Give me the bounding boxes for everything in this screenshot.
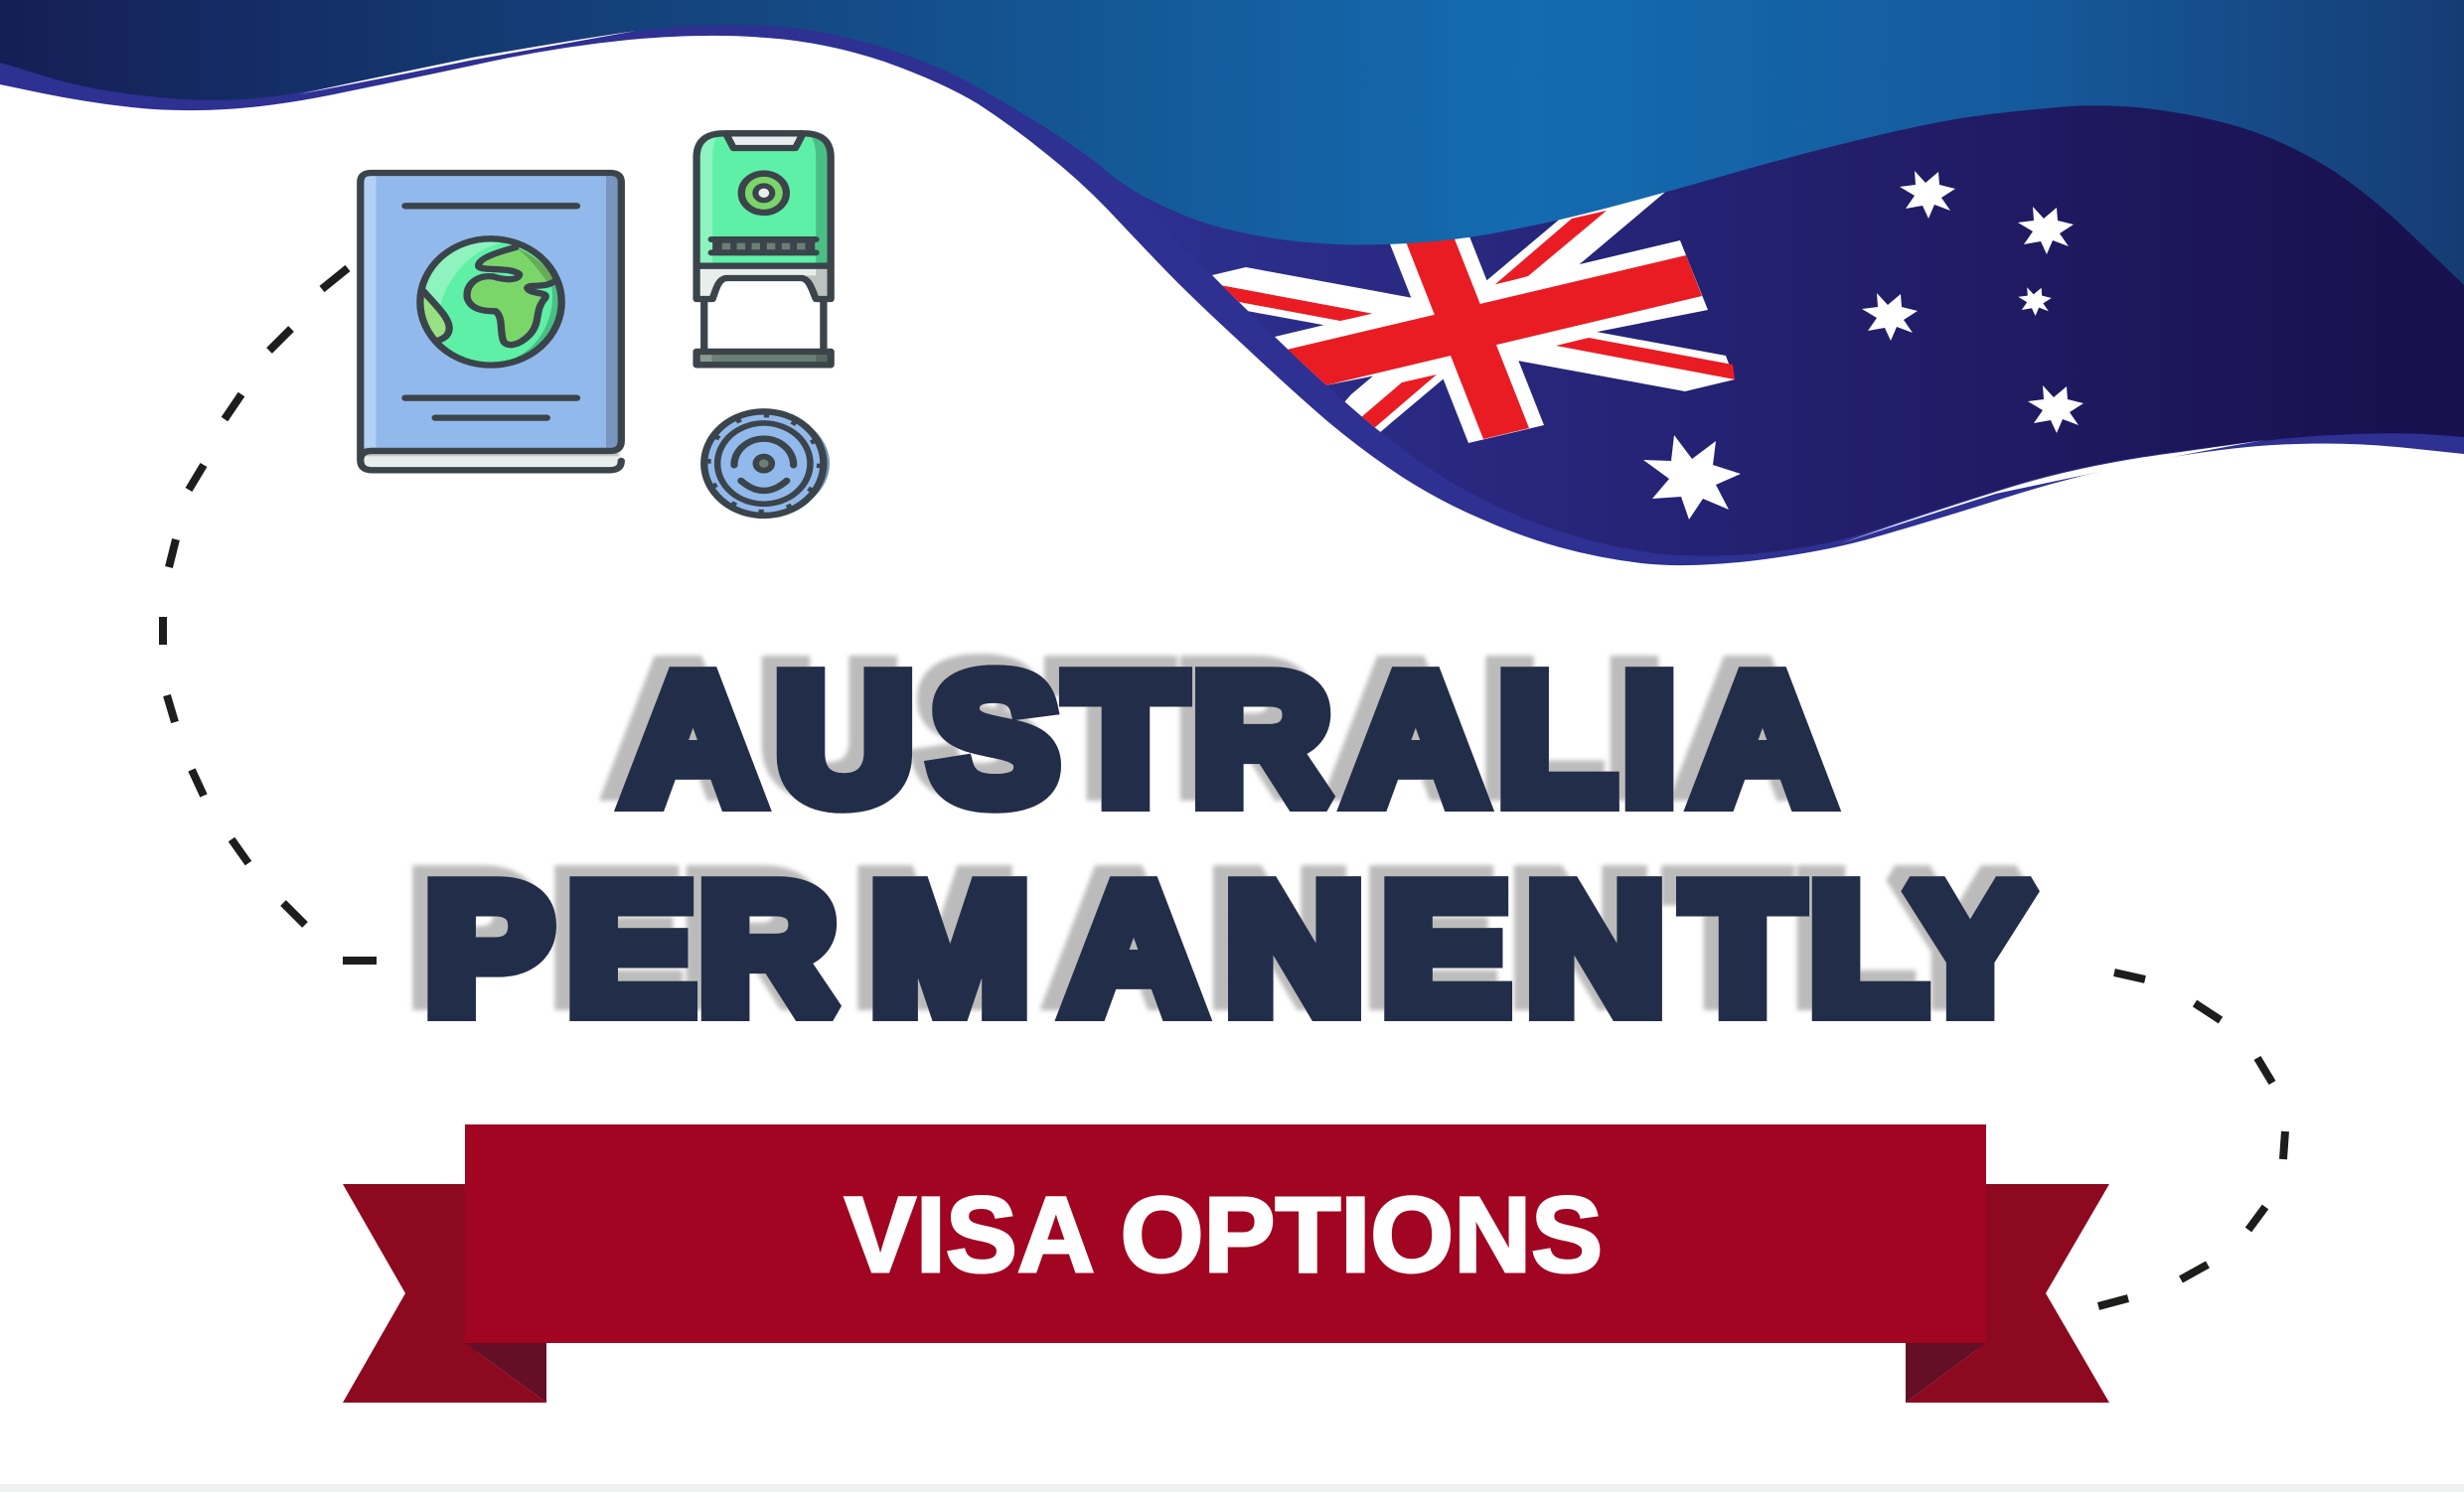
dashed route right — [2098, 972, 2285, 1306]
Australian flag wave — [1212, 105, 2464, 556]
icons: passport and stamp — [361, 133, 831, 516]
ribbon main band — [465, 1124, 1986, 1343]
header wave: purple edge band — [0, 0, 2464, 565]
ribbon right tail — [1977, 1184, 2109, 1403]
title line 2: PERMANENTLY — [425, 846, 2034, 1050]
ribbon left fold — [465, 1343, 546, 1403]
white highlight slivers on wave edges — [298, 31, 2265, 544]
icon: passport — [361, 173, 621, 470]
title — [425, 637, 2034, 1050]
union jack — [1212, 189, 1735, 443]
header wave: blue gradient — [0, 0, 2464, 285]
dashed route left — [163, 268, 377, 961]
ribbon banner — [343, 1124, 2109, 1403]
ribbon left tail — [343, 1184, 477, 1403]
icon: stamp seal — [704, 411, 830, 516]
southern cross stars — [1643, 171, 2083, 520]
icon: rubber stamp — [696, 133, 831, 365]
bottom edge strip — [0, 1484, 2464, 1492]
ribbon label: VISA OPTIONS — [845, 1174, 1603, 1294]
icon: globe — [420, 238, 561, 366]
ribbon right fold — [1906, 1343, 1986, 1403]
title line 1: AUSTRALIA — [624, 637, 1831, 840]
